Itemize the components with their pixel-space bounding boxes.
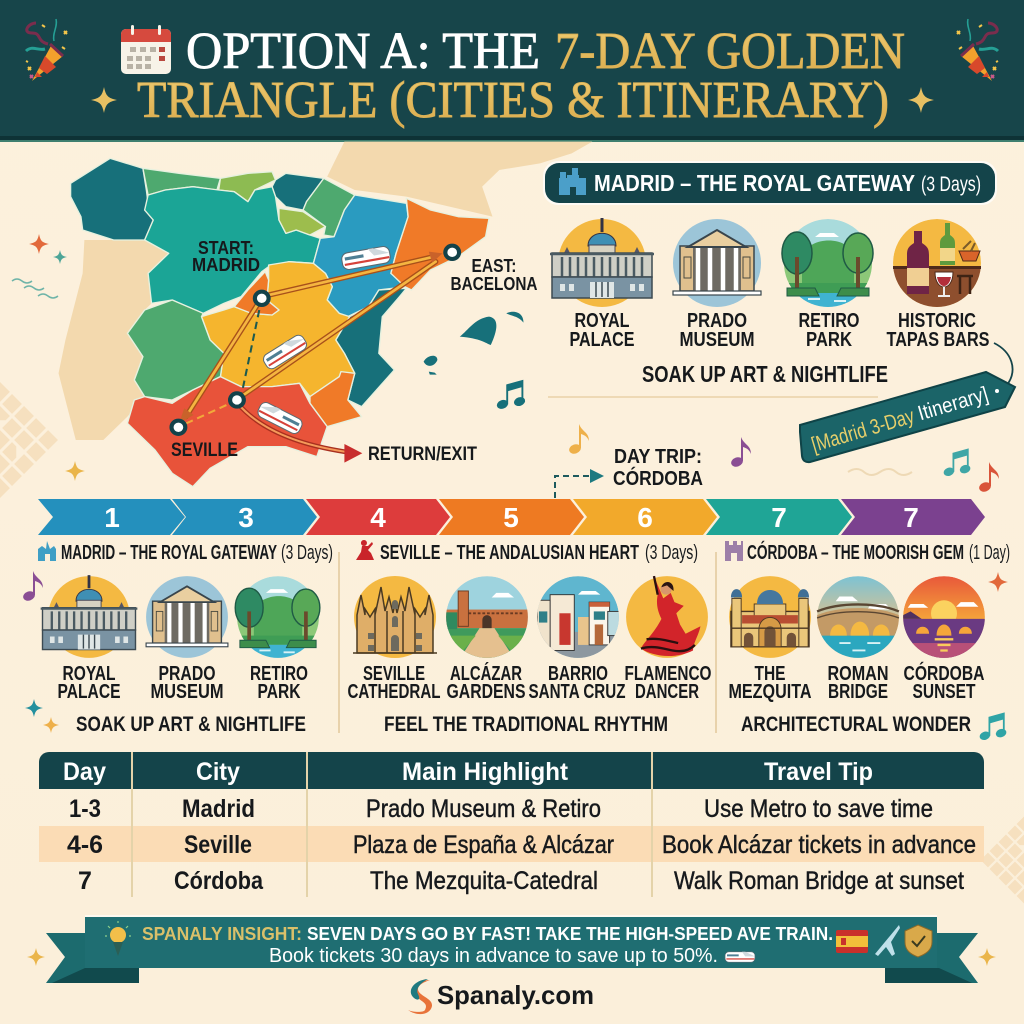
table header [39, 752, 984, 789]
label: prado museum [680, 310, 754, 351]
icon: royal palace [550, 218, 654, 307]
icon: gold sparkle right [908, 87, 934, 113]
tag: Madrid itinerary: [Madrid 3-Day [809, 405, 917, 457]
label: barrio santa cruz: BARRIO [548, 663, 608, 685]
heading: (3 Days) [645, 542, 698, 564]
day 6 [573, 499, 717, 535]
table [39, 752, 984, 897]
row: days 1-3: 1-3 [69, 795, 101, 823]
insight text: SEVEN DAYS GO BY FAST! TAKE THE HIGH-SPEED AVE TRAIN. [307, 924, 833, 944]
row: days 4-6: Seville [184, 831, 252, 859]
icon: cordoba sunset [903, 576, 985, 658]
icon: party popper right [957, 19, 998, 81]
icon: mezquita [729, 576, 811, 658]
icon: barrio santa cruz [537, 576, 621, 660]
icon: flamenco dancer [626, 576, 708, 658]
tag: Madrid itinerary [800, 343, 1015, 462]
icon: shield [905, 925, 932, 957]
label: prado museum: MUSEUM [150, 681, 224, 703]
label: royal palace: ROYAL [62, 663, 116, 685]
day 1: 1 [104, 502, 120, 533]
label: flamenco dancer: FLAMENCO [624, 663, 712, 685]
day 3 [172, 499, 317, 535]
label: retiro park: PARK [258, 681, 301, 703]
row: days 1-3: Use Metro to save time [704, 795, 933, 823]
label: alcazar gardens: GARDENS [446, 681, 526, 703]
tagline: FEEL THE TRADITIONAL RHYTHM [384, 713, 668, 736]
icon: retiro park [782, 219, 873, 309]
icon: train Madrid-Barcelona [341, 246, 391, 270]
label: retiro park: PARK [806, 329, 852, 351]
title: 7-DAY GOLDEN [555, 23, 905, 80]
label: royal palace [58, 663, 120, 703]
row: day 7: The Mezquita-Catedral [370, 867, 598, 895]
day 5: 5 [503, 502, 519, 533]
tag: Madrid itinerary: Itinerary] [915, 383, 991, 425]
label: return exit: RETURN/EXIT [368, 444, 477, 465]
icon: calendar [121, 25, 171, 74]
day 6: 6 [637, 502, 653, 533]
heading: SEVILLE – THE ANDALUSIAN HEART [380, 542, 639, 564]
label: cordoba sunset [904, 661, 984, 703]
title [137, 23, 905, 129]
header banner [0, 0, 1024, 142]
insight text: Book tickets 30 days in advance to save up to 50%. [269, 945, 718, 967]
panel: Seville [348, 540, 712, 736]
label: prado museum: PRADO [158, 663, 216, 685]
icon: train south [256, 400, 304, 436]
label: start Madrid [192, 238, 260, 275]
day 1 [38, 499, 185, 535]
day 4: 4 [370, 502, 386, 533]
icon: party popper left [26, 19, 67, 81]
icon: plane [875, 925, 900, 956]
label: mezquita: THE [754, 663, 786, 685]
label: Seville: SEVILLE [171, 440, 238, 461]
label: cordoba sunset: SUNSET [912, 681, 976, 703]
title: TRIANGLE (CITIES & ITINERARY) [137, 72, 889, 129]
label: seville cathedral: CATHEDRAL [348, 681, 440, 703]
icon: lightbulb [105, 921, 131, 956]
day 3: 3 [238, 502, 254, 533]
label: east Barcelona: EAST: [472, 256, 516, 276]
day 7 purple [841, 499, 985, 535]
decorative stars and notes [12, 234, 1008, 966]
tagline: SOAK UP ART & NIGHTLIFE [642, 361, 888, 387]
icon: spain flag [836, 930, 868, 953]
row: days 1-3: Prado Museum & Retiro [366, 795, 601, 823]
day 7 teal: 7 [771, 502, 787, 533]
row: days 4-6: Book Alcázar tickets in advance [662, 831, 976, 859]
heading pill [543, 161, 997, 205]
timeline chevrons [38, 499, 985, 535]
label: roman bridge: BRIDGE [828, 681, 888, 703]
row: day 7: 7 [78, 867, 92, 895]
icon: alcazar gardens [446, 576, 528, 660]
label: seville cathedral: SEVILLE [363, 663, 425, 685]
row: days 4-6: Plaza de España & Alcázar [353, 831, 614, 859]
label: start Madrid: MADRID [192, 255, 260, 275]
icon: roman bridge [817, 576, 899, 660]
insight ribbon [46, 915, 978, 983]
icon: small train [725, 952, 755, 962]
table header: Travel Tip [764, 758, 873, 786]
label: royal palace: PALACE [570, 329, 634, 351]
table header: City [196, 758, 240, 786]
label: retiro park: RETIRO [798, 310, 860, 332]
label: start Madrid: START: [198, 238, 254, 258]
label: tapas bars: HISTORIC [898, 310, 976, 332]
heading: (3 Days) [281, 542, 333, 564]
heading pill: MADRID – THE ROYAL GATEWAY [594, 170, 915, 196]
label: roman bridge: ROMAN [828, 663, 888, 685]
label: east Barcelona [450, 256, 538, 294]
icon: train center [261, 333, 309, 371]
decorative pattern: right [981, 817, 1024, 903]
icon: tapas bar [893, 219, 981, 307]
row: days 1-3 [69, 795, 933, 823]
row: day 7: Córdoba [174, 867, 264, 895]
decorative pattern: left [0, 382, 58, 498]
label: retiro park [798, 310, 860, 351]
icon: gold sparkle left [91, 87, 117, 113]
label: mezquita [728, 663, 812, 703]
label: east Barcelona: BACELONA [450, 274, 538, 294]
table header: Day [63, 758, 106, 786]
day 7 teal [706, 499, 852, 535]
title: OPTION A: THE [186, 23, 540, 80]
label: seville cathedral [348, 663, 440, 703]
day trip callout: CÓRDOBA [613, 466, 703, 490]
panel: Madrid top [543, 161, 1015, 462]
label: retiro park: RETIRO [250, 663, 308, 685]
tagline: SOAK UP ART & NIGHTLIFE [76, 713, 306, 736]
row: day 7 [78, 867, 964, 895]
label: alcazar gardens: ALCÁZAR [450, 662, 522, 685]
label: barrio santa cruz [528, 663, 626, 703]
label: mezquita: MEZQUITA [728, 681, 812, 703]
label: cordoba sunset: CÓRDOBA [904, 661, 984, 685]
label: royal palace [570, 310, 634, 351]
label: tapas bars: TAPAS BARS [886, 329, 990, 351]
day 7 purple: 7 [903, 502, 919, 533]
day 4 [306, 499, 450, 535]
table header: Main Highlight [402, 758, 569, 786]
icon: prado museum [673, 219, 761, 307]
label: royal palace: ROYAL [574, 310, 630, 332]
row: days 4-6 [67, 831, 976, 859]
row: days 1-3: Madrid [182, 795, 255, 823]
tagline: ARCHITECTURAL WONDER [741, 713, 971, 736]
brand logo [408, 979, 594, 1014]
label: flamenco dancer [624, 663, 712, 703]
brand name: Spanaly.com [437, 980, 594, 1010]
icon: prado museum [146, 576, 228, 658]
insight text [142, 924, 833, 967]
panel: Madrid [38, 541, 333, 736]
panel: Cordoba [725, 540, 1010, 736]
label: alcazar gardens [446, 662, 526, 703]
icon: royal palace [41, 575, 137, 658]
heading: MADRID – THE ROYAL GATEWAY [61, 542, 277, 564]
label: prado museum: MUSEUM [680, 329, 754, 351]
label: barrio santa cruz: SANTA CRUZ [528, 681, 626, 703]
day trip callout [555, 446, 703, 498]
dividers [339, 552, 716, 733]
label: royal palace: PALACE [58, 681, 120, 703]
label: roman bridge [828, 663, 888, 703]
icon: spanaly logo [408, 979, 432, 1014]
icon: seville cathedral [353, 576, 437, 658]
day trip callout: DAY TRIP: [614, 446, 702, 468]
row: day 7: Walk Roman Bridge at sunset [674, 867, 964, 895]
row: days 4-6: 4-6 [67, 831, 103, 859]
label: retiro park [250, 663, 308, 703]
day 5 [439, 499, 584, 535]
insight text: SPANALY INSIGHT: [142, 924, 302, 944]
label: prado museum [150, 663, 224, 703]
map of Spain [59, 142, 592, 487]
label: prado museum: PRADO [687, 310, 747, 332]
icon: retiro park [235, 576, 320, 660]
label: tapas bars [886, 310, 990, 351]
heading pill: (3 Days) [921, 173, 981, 196]
label: flamenco dancer: DANCER [635, 681, 699, 703]
